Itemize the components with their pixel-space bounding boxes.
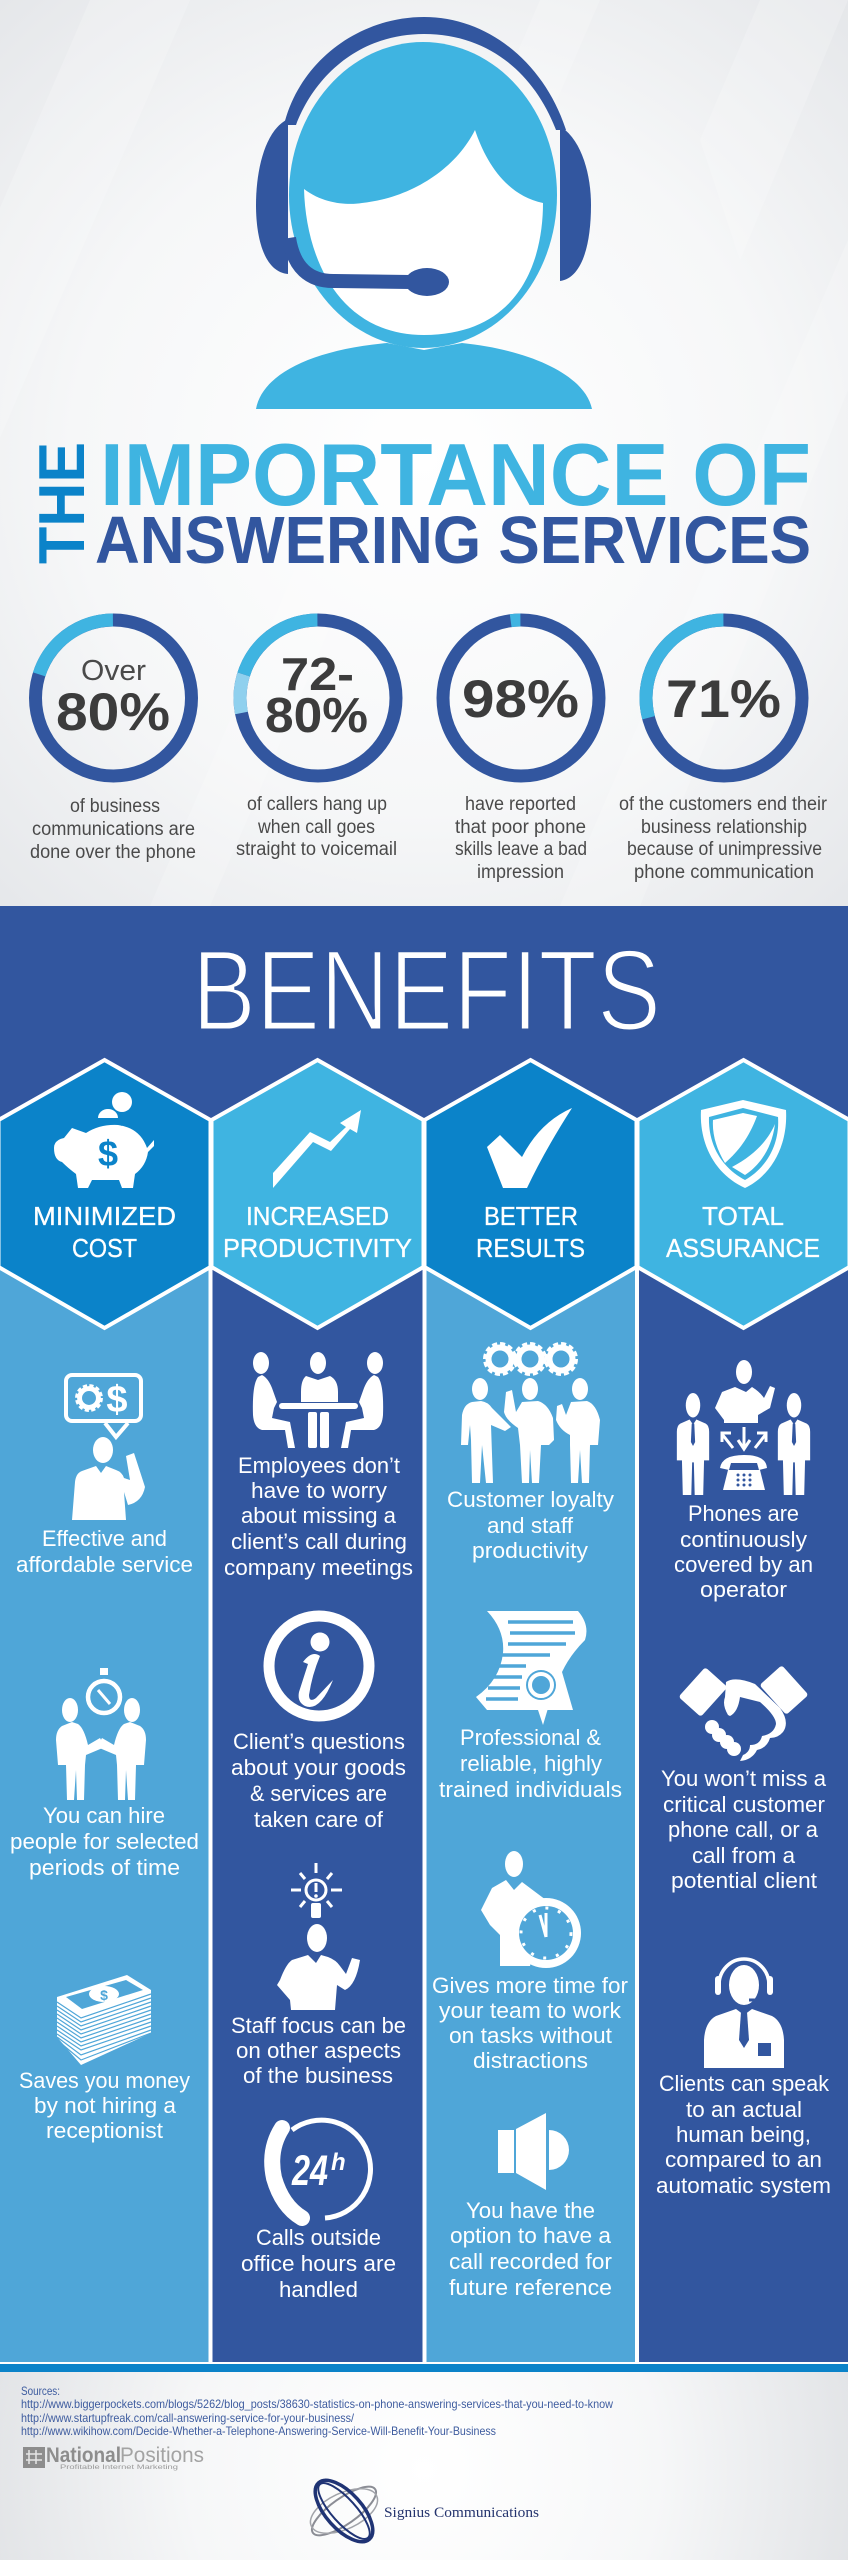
text: customer loyalty: Customer loyalty bbox=[447, 1487, 614, 1512]
text: human being: human being, bbox=[676, 2122, 811, 2147]
hexagon: increased productivity bbox=[212, 1060, 424, 1328]
stat: over 80%: communications are bbox=[32, 819, 195, 840]
text: critical call: potential client bbox=[671, 1868, 817, 1893]
text: more time: distractions bbox=[473, 2048, 588, 2073]
column backgrounds bbox=[0, 1120, 639, 2362]
text: staff focus: Staff focus can be bbox=[231, 2013, 406, 2038]
stat: over 80% bbox=[30, 620, 196, 863]
icon: speech bubble and man bbox=[66, 1375, 145, 1520]
icon: information bbox=[269, 1616, 369, 1716]
text: calls outside office hours: Calls outside bbox=[256, 2225, 381, 2250]
stat: 71%: 71% bbox=[666, 670, 781, 729]
icon: 24h phone bbox=[272, 2120, 370, 2218]
text: staff focus bbox=[231, 2013, 406, 2088]
text: human being: compared to an bbox=[665, 2147, 822, 2172]
stat: 72-80%: 72- bbox=[281, 648, 354, 700]
sources: http://www.biggerpockets.com/blogs/5262/blog_posts/38630-statistics-on-phone-answering-services-that-you-need-to-know bbox=[21, 2397, 613, 2411]
stat: over 80%: 80% bbox=[56, 683, 170, 742]
stat: 98%: impression bbox=[477, 862, 564, 883]
sources: http://www.wikihow.com/Decide-Whether-a-Telephone-Answering-Service-Will-Benefit-Your-Business bbox=[21, 2424, 496, 2438]
icon: speech bubble and man: $ bbox=[106, 1379, 128, 1421]
logo: signius communications bbox=[304, 2471, 539, 2551]
text: hire for selected periods bbox=[10, 1803, 199, 1880]
text: meetings: client’s call during bbox=[231, 1529, 407, 1554]
text: human being bbox=[656, 2071, 831, 2198]
text: client questions: Client’s questions bbox=[233, 1729, 405, 1754]
stat: over 80%: Over bbox=[81, 655, 146, 687]
label: total assurance bbox=[666, 1201, 820, 1263]
stat: 71%: of the customers end their bbox=[619, 794, 828, 815]
icon: piggy bank bbox=[54, 1092, 154, 1188]
stat: 72-80%: 80% bbox=[265, 689, 368, 743]
text: professional: trained individuals bbox=[439, 1777, 622, 1802]
icon: rising arrow bbox=[273, 1110, 361, 1188]
text: client questions: & services are bbox=[250, 1781, 387, 1806]
icon: 24h phone: 24 bbox=[291, 2147, 328, 2195]
stat: 72-80% bbox=[236, 620, 397, 860]
stat: 72-80%: straight to voicemail bbox=[236, 839, 397, 860]
text: meetings: about missing a bbox=[241, 1503, 397, 1528]
text: effective and affordable: Effective and bbox=[42, 1526, 167, 1551]
icon: man with clock bbox=[481, 1851, 581, 1968]
label: minimized cost: MINIMIZED bbox=[33, 1201, 176, 1231]
icon: meeting at table bbox=[253, 1352, 383, 1448]
label: minimized cost bbox=[33, 1201, 176, 1263]
text: professional: reliable, highly bbox=[460, 1751, 602, 1776]
label: increased productivity bbox=[223, 1201, 412, 1263]
text: phones covered: continuously bbox=[680, 1527, 807, 1552]
heading: benefits: BENEFITS bbox=[192, 927, 661, 1055]
text: saves money: receptionist bbox=[46, 2118, 163, 2143]
icon: lightbulb and man bbox=[277, 1863, 360, 2010]
text: customer loyalty bbox=[447, 1487, 614, 1563]
column 2 benefits bbox=[224, 1352, 413, 2302]
text: calls outside office hours bbox=[241, 2225, 396, 2302]
column 3 benefits bbox=[432, 1344, 628, 2300]
text: more time: on tasks without bbox=[449, 2023, 612, 2048]
icon: 24h phone: h bbox=[331, 2149, 346, 2176]
text: hire for selected periods: periods of time bbox=[29, 1855, 180, 1880]
stat: 98% bbox=[443, 620, 599, 883]
text: client questions: taken care of bbox=[254, 1807, 384, 1832]
text: saves money: Saves you money bbox=[19, 2068, 190, 2093]
stat: 71% bbox=[619, 620, 828, 883]
text: meetings bbox=[224, 1453, 413, 1580]
text: calls outside office hours: handled bbox=[279, 2277, 358, 2302]
text: critical call: critical customer bbox=[663, 1792, 825, 1817]
title: ANSWERING SERVICES bbox=[95, 503, 811, 578]
text: human being: Clients can speak bbox=[659, 2071, 830, 2096]
title bbox=[25, 425, 811, 578]
label: better results: RESULTS bbox=[476, 1233, 585, 1263]
hexagon: total assurance bbox=[638, 1060, 848, 1328]
text: phones covered: Phones are bbox=[688, 1501, 799, 1526]
text: effective and affordable bbox=[16, 1526, 193, 1577]
text: saves money: by not hiring a bbox=[34, 2093, 177, 2118]
label: better results: BETTER bbox=[484, 1201, 578, 1231]
logo: national positions: Positions bbox=[120, 2444, 204, 2467]
label: total assurance: TOTAL bbox=[702, 1201, 784, 1231]
text: human being: automatic system bbox=[656, 2173, 831, 2198]
stat: 98%: 98% bbox=[462, 670, 579, 729]
logo: signius communications: Signius Communications bbox=[384, 2505, 539, 2521]
text: more time bbox=[432, 1973, 628, 2073]
stat: 71%: phone communication bbox=[634, 862, 814, 883]
label: minimized cost: COST bbox=[72, 1233, 137, 1263]
text: critical call: call from a bbox=[692, 1843, 796, 1868]
text: professional: Professional & bbox=[460, 1725, 601, 1750]
stat: over 80%: done over the phone bbox=[30, 842, 196, 863]
icon: stopwatch and handshake bbox=[56, 1668, 146, 1800]
label: increased productivity: INCREASED bbox=[246, 1201, 389, 1231]
icon: team and telephone bbox=[677, 1360, 810, 1495]
text: recording: You have the bbox=[466, 2198, 595, 2223]
background: top section bbox=[0, 0, 848, 906]
stat: 72-80%: when call goes bbox=[257, 817, 375, 838]
text: recording: future reference bbox=[449, 2275, 612, 2300]
text: hire for selected periods: people for selected bbox=[10, 1829, 199, 1854]
text: staff focus: on other aspects bbox=[236, 2038, 401, 2063]
text: meetings: company meetings bbox=[224, 1555, 413, 1580]
text: meetings: have to worry bbox=[251, 1478, 387, 1503]
text: phones covered bbox=[674, 1501, 813, 1602]
hexagon: better results bbox=[424, 1060, 636, 1328]
stat: 71%: business relationship bbox=[641, 817, 807, 838]
column 4 benefits bbox=[656, 1360, 831, 2198]
stat: 98%: that poor phone bbox=[455, 817, 586, 838]
logo: national positions: Profitable Internet Marketing bbox=[60, 2465, 178, 2471]
icon: operator bbox=[704, 1959, 784, 2068]
stat: 71%: because of unimpressive bbox=[627, 839, 822, 860]
text: staff focus: of the business bbox=[243, 2063, 393, 2088]
sources bbox=[21, 2384, 613, 2438]
icon: stack of money: $ bbox=[100, 1987, 108, 2003]
text: client questions: about your goods bbox=[231, 1755, 406, 1780]
icon: handshake bbox=[678, 1665, 809, 1761]
logo: national positions: National bbox=[46, 2444, 121, 2467]
text: more time: your team to work bbox=[439, 1998, 622, 2023]
icon: gears and team bbox=[461, 1344, 600, 1483]
text: phones covered: operator bbox=[700, 1577, 787, 1602]
text: effective and affordable: affordable service bbox=[16, 1552, 193, 1577]
benefits panel background bbox=[0, 906, 848, 2362]
stat: 98%: skills leave a bad bbox=[455, 839, 587, 860]
text: customer loyalty: productivity bbox=[472, 1538, 588, 1563]
stat: 72-80%: of callers hang up bbox=[247, 794, 387, 815]
title: IMPORTANCE OF bbox=[100, 425, 811, 524]
text: hire for selected periods: You can hire bbox=[43, 1803, 165, 1828]
logo: national positions bbox=[23, 2444, 204, 2471]
label: increased productivity: PRODUCTIVITY bbox=[223, 1233, 412, 1263]
text: recording: call recorded for bbox=[449, 2249, 612, 2274]
text: customer loyalty: and staff bbox=[487, 1513, 574, 1538]
title: THE bbox=[25, 442, 98, 564]
icon: check mark bbox=[487, 1108, 572, 1188]
text: saves money bbox=[19, 2068, 190, 2143]
icon: shield bbox=[701, 1100, 786, 1188]
sources: http://www.startupfreak.com/call-answering-service-for-your-business/ bbox=[21, 2411, 355, 2425]
label: better results bbox=[476, 1201, 585, 1263]
text: meetings: Employees don’t bbox=[238, 1453, 400, 1478]
hero icon: operator with headset bbox=[256, 17, 592, 409]
footer divider band bbox=[0, 2362, 848, 2372]
icon: certificate bbox=[476, 1611, 586, 1725]
text: recording: option to have a bbox=[450, 2223, 612, 2248]
text: critical call: phone call, or a bbox=[668, 1817, 819, 1842]
icon: speaker bbox=[498, 2113, 569, 2190]
text: human being: to an actual bbox=[686, 2097, 802, 2122]
icon: stack of money bbox=[57, 1975, 151, 2065]
text: professional bbox=[439, 1725, 622, 1802]
background: footer section bbox=[0, 2372, 848, 2560]
column 1 benefits bbox=[10, 1375, 199, 2143]
label: total assurance: ASSURANCE bbox=[666, 1233, 820, 1263]
icon: piggy bank: $ bbox=[98, 1133, 118, 1174]
stat: 98%: have reported bbox=[465, 794, 576, 815]
text: phones covered: covered by an bbox=[674, 1552, 813, 1577]
sources: Sources: bbox=[21, 2384, 60, 2398]
text: recording bbox=[449, 2198, 612, 2300]
text: critical call bbox=[661, 1766, 827, 1893]
stat: over 80%: of business bbox=[70, 796, 160, 817]
text: calls outside office hours: office hours are bbox=[241, 2251, 396, 2276]
text: more time: Gives more time for bbox=[432, 1973, 628, 1998]
hexagon: minimized cost bbox=[0, 1060, 210, 1328]
text: client questions bbox=[231, 1729, 406, 1832]
text: critical call: You won’t miss a bbox=[661, 1766, 827, 1791]
